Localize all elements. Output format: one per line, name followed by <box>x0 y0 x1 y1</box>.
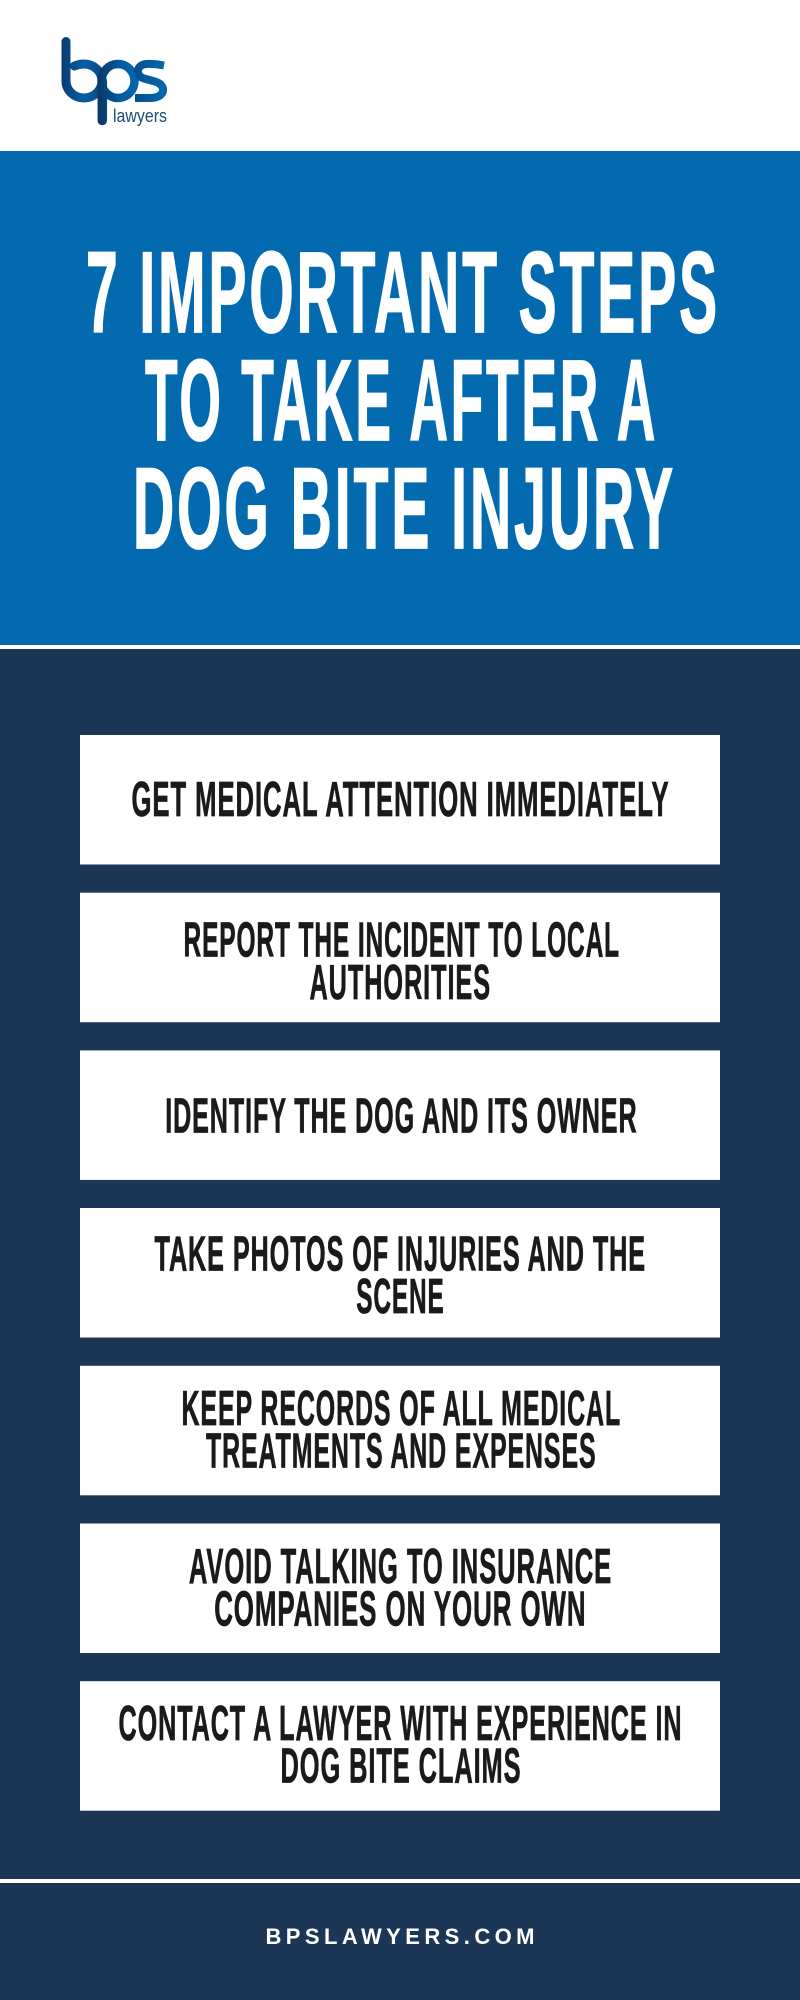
title band <box>0 151 800 645</box>
step 2: AUTHORITIES <box>310 955 491 1010</box>
step 4 <box>80 1208 720 1338</box>
step 5 <box>80 1366 720 1495</box>
footer band <box>0 1883 800 2000</box>
steps panel <box>0 649 800 1879</box>
step 4: SCENE <box>356 1269 445 1324</box>
header band <box>0 0 800 151</box>
logo: bps lawyers: lawyers <box>113 105 167 126</box>
website: BPSLAWYERS.COM <box>266 1924 534 1949</box>
step 2 <box>80 893 720 1022</box>
footer line <box>0 1879 800 1883</box>
step 3 <box>80 1050 720 1180</box>
step 6 <box>80 1524 720 1653</box>
step 7 <box>80 1681 720 1811</box>
divider line <box>0 645 800 649</box>
step 7: DOG BITE CLAIMS <box>280 1739 522 1794</box>
step 1 <box>80 735 720 864</box>
title <box>86 229 720 573</box>
logo: bps lawyers <box>66 42 167 126</box>
